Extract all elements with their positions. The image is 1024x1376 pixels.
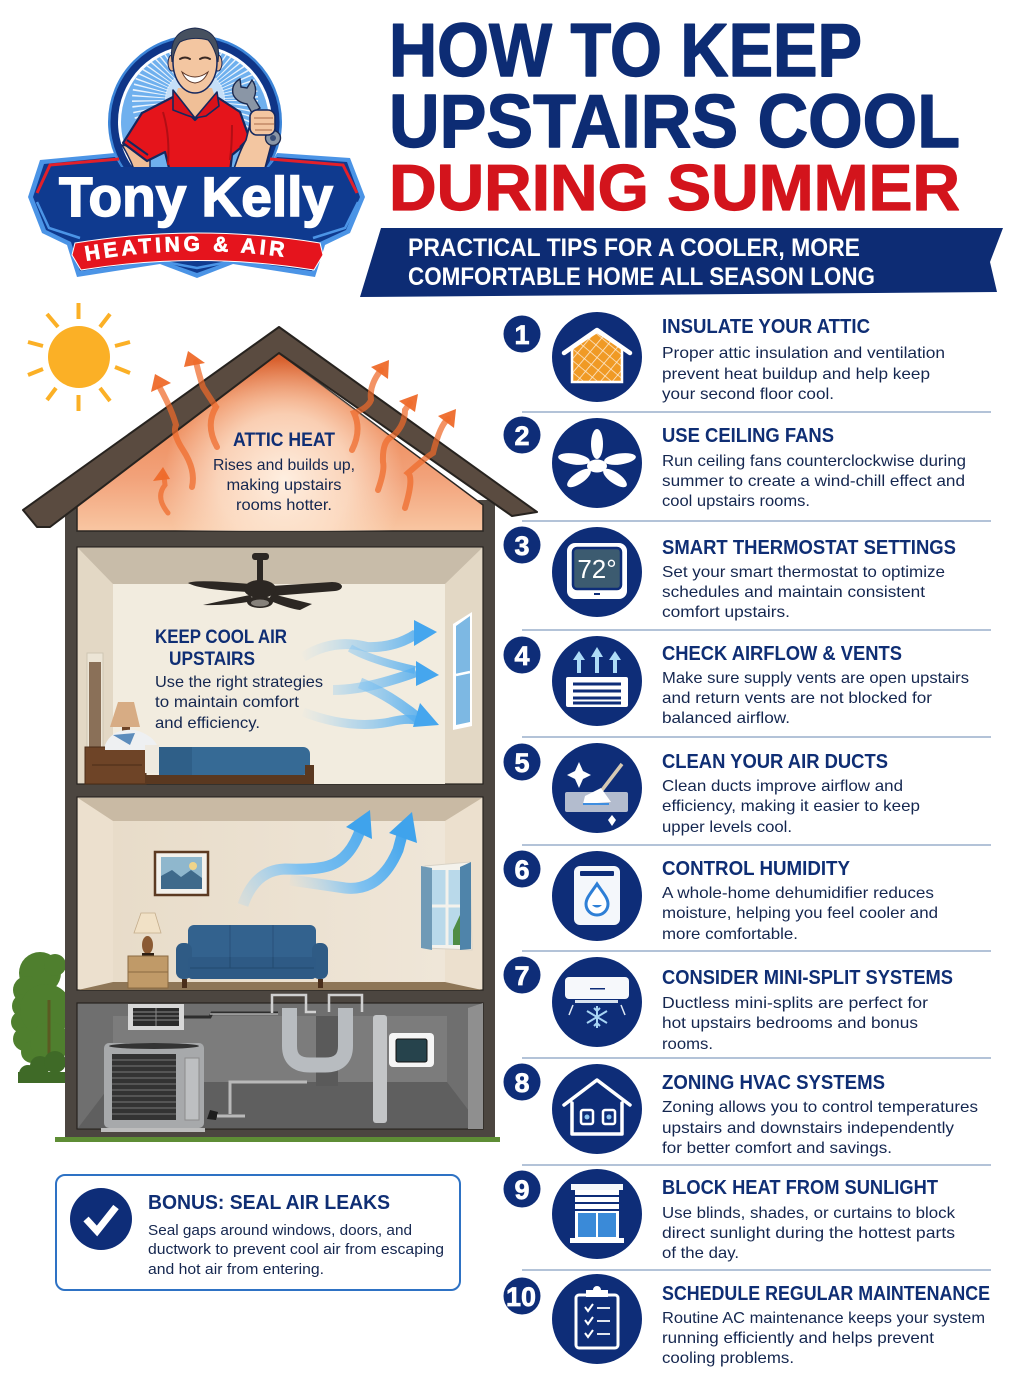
number badge 8 xyxy=(504,1064,540,1100)
tip 5 text: efficiency, making it easier to keep xyxy=(662,798,920,815)
subtitle banner: PRACTICAL TIPS FOR A COOLER, MORE xyxy=(408,234,860,262)
mascot: man with wrench xyxy=(122,28,280,172)
company logo xyxy=(28,28,365,278)
icon: zoned house xyxy=(552,1064,642,1154)
bonus heading: BONUS: SEAL AIR LEAKS xyxy=(148,1191,390,1214)
mirror xyxy=(87,653,103,770)
logo ring xyxy=(108,37,282,167)
side table xyxy=(128,956,168,988)
icon: maintenance clipboard xyxy=(552,1274,642,1364)
bonus body xyxy=(148,1222,444,1278)
room text: KEEP COOL AIR xyxy=(155,626,287,648)
number badge 9: 9 xyxy=(514,1175,530,1205)
cool air arrows xyxy=(303,620,439,727)
ductwork xyxy=(210,995,362,1116)
room text: Use the right strategies xyxy=(155,674,323,691)
tip 9 text: BLOCK HEAT FROM SUNLIGHT xyxy=(662,1176,938,1199)
title: HOW TO KEEP xyxy=(389,8,862,92)
icon: smart thermostat xyxy=(552,527,642,617)
pillows xyxy=(105,730,158,750)
sofa xyxy=(176,925,328,988)
tip 9 text: direct sunlight during the hottest parts xyxy=(662,1225,955,1242)
tip 3 text: SMART THERMOSTAT SETTINGS xyxy=(662,536,956,559)
icon: insulated attic house xyxy=(552,312,642,402)
tip 7 text: Ductless mini-splits are perfect for xyxy=(662,995,928,1012)
tip 7 text: hot upstairs bedrooms and bonus xyxy=(662,1015,918,1032)
tip 2 text: summer to create a wind-chill effect and xyxy=(662,473,965,490)
number badge 1: 1 xyxy=(514,320,530,350)
number badge 8: 8 xyxy=(514,1068,530,1098)
number badge 1 xyxy=(504,316,540,352)
tip 10 text xyxy=(662,1282,990,1367)
table lamp xyxy=(134,913,161,956)
icon: window blinds xyxy=(552,1169,642,1259)
icon: supply vent with arrows xyxy=(552,636,642,726)
number badge 9 xyxy=(504,1170,540,1208)
attic heat text: making upstairs xyxy=(226,477,342,494)
tip 2 text: USE CEILING FANS xyxy=(662,424,834,447)
tip 1 text: prevent heat buildup and help keep xyxy=(662,366,930,383)
icon: ceiling fan xyxy=(552,418,642,508)
tip 1 text xyxy=(662,315,945,403)
number badge 3 xyxy=(504,526,540,564)
tree xyxy=(11,952,65,1083)
tip 8 text xyxy=(662,1071,978,1157)
tip 4 text: balanced airflow. xyxy=(662,710,790,727)
tip 5 text: upper levels cool. xyxy=(662,819,792,836)
tip 5 text: CLEAN YOUR AIR DUCTS xyxy=(662,750,888,773)
warm air arrows xyxy=(243,810,417,905)
lower room xyxy=(77,797,483,990)
tip 6 text xyxy=(662,857,938,943)
tip 7 xyxy=(504,956,953,1053)
logo name: Tony Kelly xyxy=(59,165,333,228)
tip 1 xyxy=(504,312,945,403)
attic heat text: Rises and builds up, xyxy=(213,457,355,474)
vertical pipe xyxy=(373,1015,387,1123)
tip 8 xyxy=(504,1064,978,1157)
tip 1 text: INSULATE YOUR ATTIC xyxy=(662,315,870,338)
tip 8 text: Zoning allows you to control temperatures xyxy=(662,1099,978,1116)
title: UPSTAIRS COOL xyxy=(389,79,960,163)
nightstand and lamp xyxy=(85,702,146,784)
tip 6 text: more comfortable. xyxy=(662,926,798,943)
number badge 5 xyxy=(504,744,540,780)
number badge 6: 6 xyxy=(514,855,530,885)
icon: mini-split unit xyxy=(552,957,642,1047)
tip 3 text: Set your smart thermostat to optimize xyxy=(662,564,945,581)
tip 2 text: Run ceiling fans counterclockwise during xyxy=(662,453,966,470)
roof xyxy=(23,327,537,527)
tip 4 text: Make sure supply vents are open upstairs xyxy=(662,670,969,687)
tip 4 text: and return vents are not blocked for xyxy=(662,690,932,707)
tip 10 text: running efficiently and helps prevent xyxy=(662,1330,935,1347)
bonus body: Seal gaps around windows, doors, and xyxy=(148,1222,412,1239)
icon: check mark xyxy=(70,1188,132,1250)
tip 10 text: cooling problems. xyxy=(662,1350,794,1367)
tip 7 text xyxy=(662,966,953,1053)
tip 3 text xyxy=(662,536,956,621)
bonus body: ductwork to prevent cool air from escaping xyxy=(148,1241,444,1258)
basement xyxy=(77,995,483,1132)
tip 7 text: rooms. xyxy=(662,1036,713,1053)
tip 5 text xyxy=(662,750,920,836)
number badge 4: 4 xyxy=(514,641,530,671)
tip 5 text: Clean ducts improve airflow and xyxy=(662,778,903,795)
tip 9 text xyxy=(662,1176,955,1262)
tip 7 text: CONSIDER MINI-SPLIT SYSTEMS xyxy=(662,966,953,989)
number badge 2: 2 xyxy=(514,421,530,451)
icon: sun xyxy=(28,303,130,411)
house cross-section xyxy=(23,327,537,1142)
bedroom window xyxy=(453,612,472,730)
number badge 5: 5 xyxy=(514,748,530,778)
number badge 6 xyxy=(504,850,540,888)
tip 4 xyxy=(504,636,969,727)
tip 9 text: Use blinds, shades, or curtains to block xyxy=(662,1205,955,1222)
tip 8 text: for better comfort and savings. xyxy=(662,1140,892,1157)
number badge 2 xyxy=(504,416,540,454)
tip 1 text: your second floor cool. xyxy=(662,386,834,403)
number badge 3: 3 xyxy=(514,531,530,561)
bed xyxy=(145,745,314,784)
bonus callout xyxy=(56,1175,460,1290)
logo badge shape xyxy=(28,153,365,278)
wall grille xyxy=(128,1004,278,1030)
subtitle banner xyxy=(360,228,1003,297)
tip 9 text: of the day. xyxy=(662,1245,739,1262)
tip 3 text: schedules and maintain consistent xyxy=(662,584,926,601)
upper room xyxy=(77,547,483,784)
tip 10 text: Routine AC maintenance keeps your system xyxy=(662,1310,985,1327)
icon: duct cleaning brush xyxy=(552,743,642,833)
attic heat text xyxy=(213,429,355,514)
title: DURING SUMMER xyxy=(389,151,960,224)
framed picture xyxy=(155,852,208,895)
living room window xyxy=(421,862,472,950)
tip 6 text: moisture, helping you feel cooler and xyxy=(662,905,938,922)
logo tagline ribbon: HEATING & AIR xyxy=(84,236,284,261)
tip 2 xyxy=(504,416,966,510)
air conditioner unit xyxy=(101,1043,218,1132)
tip 2 text xyxy=(662,424,966,510)
attic heat text: ATTIC HEAT xyxy=(233,429,335,451)
number badge 4 xyxy=(504,636,540,674)
attic heat text: rooms hotter. xyxy=(236,497,332,514)
subtitle banner: COMFORTABLE HOME ALL SEASON LONG xyxy=(408,263,875,291)
number badge 7: 7 xyxy=(514,961,530,991)
tip 10 xyxy=(504,1274,990,1367)
icon: smart thermostat: 72° xyxy=(577,554,617,584)
tip 4 text: CHECK AIRFLOW & VENTS xyxy=(662,642,902,665)
tip 6 xyxy=(504,850,938,943)
tip 4 text xyxy=(662,642,969,727)
wall thermostat xyxy=(389,1033,434,1067)
heat arrows xyxy=(151,351,456,513)
icon: dehumidifier xyxy=(552,851,642,941)
tip 2 text: cool upstairs rooms. xyxy=(662,493,810,510)
tip 3 xyxy=(504,526,956,621)
tip 6 text: A whole-home dehumidifier reduces xyxy=(662,885,934,902)
ground xyxy=(55,1137,500,1142)
number badge 7 xyxy=(504,956,540,994)
tip 9 xyxy=(504,1169,955,1262)
attic xyxy=(77,353,483,531)
room text: and efficiency. xyxy=(155,715,260,732)
title xyxy=(389,8,960,224)
tip 5 xyxy=(504,743,920,836)
number badge 10: 10 xyxy=(506,1282,536,1312)
bonus body: and hot air from entering. xyxy=(148,1261,324,1278)
tip 6 text: CONTROL HUMIDITY xyxy=(662,857,850,880)
room text: to maintain comfort xyxy=(155,694,300,711)
room text xyxy=(155,626,323,732)
number badge 10 xyxy=(504,1278,540,1314)
tip 8 text: ZONING HVAC SYSTEMS xyxy=(662,1071,885,1094)
tip 3 text: comfort upstairs. xyxy=(662,604,790,621)
ceiling fan xyxy=(188,553,342,610)
tip 1 text: Proper attic insulation and ventilation xyxy=(662,345,945,362)
tip 8 text: upstairs and downstairs independently xyxy=(662,1120,954,1137)
room text: UPSTAIRS xyxy=(169,648,255,670)
house walls xyxy=(65,500,495,1137)
